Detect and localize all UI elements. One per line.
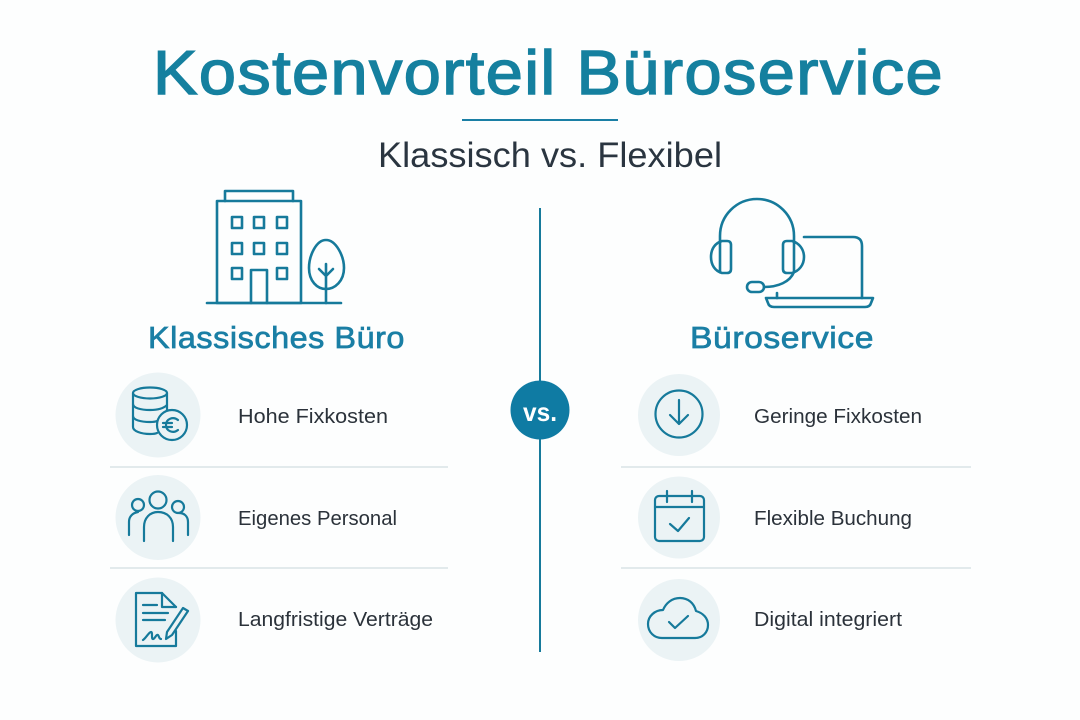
label: Eigenes Personal [238, 507, 397, 530]
icon: coins with euro [133, 388, 187, 440]
heading: Klassisches Büro: Klassisches Büro [148, 320, 405, 355]
right item: Geringe Fixkosten [638, 374, 922, 456]
central divider [539, 208, 541, 652]
icon: contract with pen [136, 593, 188, 646]
label: Digital integriert [754, 608, 902, 631]
right item: Flexible Buchung [638, 476, 912, 558]
icon: three people [129, 492, 188, 541]
vs badge: vs. [523, 397, 557, 427]
label: Flexible Buchung [754, 507, 912, 530]
heading: Büroservice: Büroservice [690, 320, 874, 355]
label: Langfristige Verträge [238, 608, 433, 631]
icon: office building with tree [207, 191, 344, 303]
label: Hohe Fixkosten [238, 405, 388, 428]
icon: cloud with check [648, 598, 708, 638]
right item: Digital integriert [638, 579, 902, 661]
title: Kostenvorteil Büroservice [153, 39, 944, 108]
vs badge [510, 380, 570, 440]
left item: Eigenes Personal [116, 475, 397, 560]
left item: Langfristige Verträge [116, 578, 433, 662]
icon: headset with laptop [711, 199, 873, 307]
icon: down arrow in circle [656, 390, 702, 438]
icon: calendar with check [655, 491, 704, 541]
subtitle: Klassisch vs. Flexibel [378, 136, 722, 175]
label: Geringe Fixkosten [754, 405, 922, 428]
left item: Hohe Fixkosten [116, 372, 388, 458]
